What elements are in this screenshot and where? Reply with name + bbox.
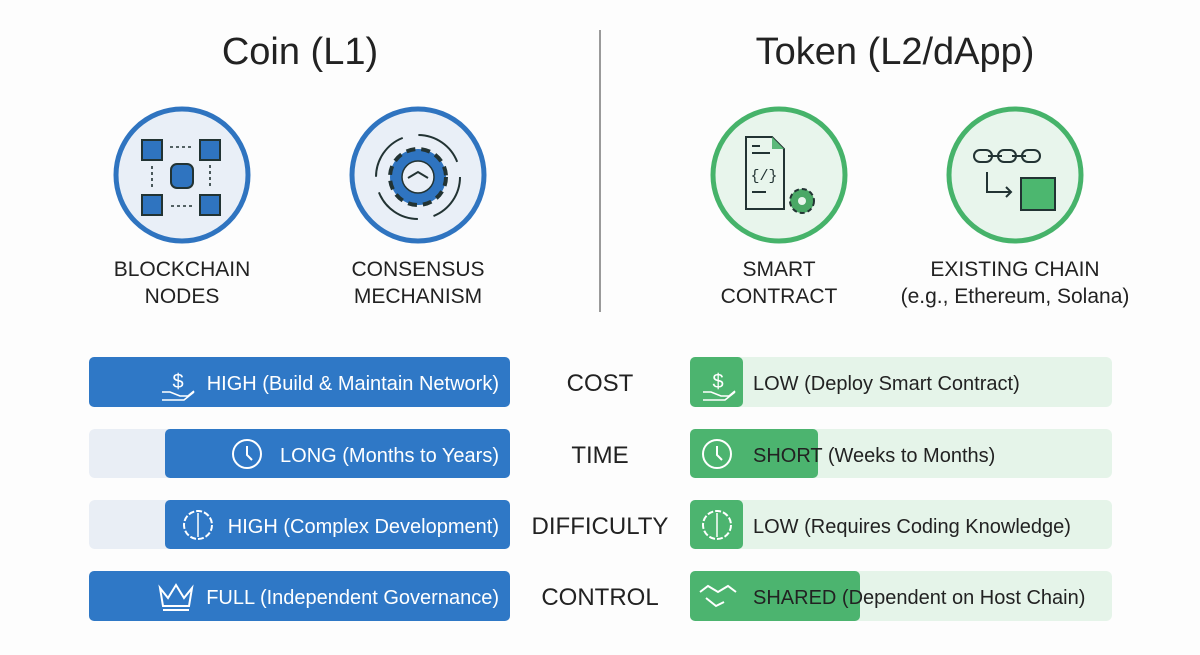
row: time: SHORT (Weeks to Months) (753, 445, 995, 467)
row: difficulty: LOW (Requires Coding Knowledge) (753, 516, 1071, 538)
label: blockchain nodes: BLOCKCHAIN (114, 258, 250, 281)
row: cost: $ (172, 371, 184, 393)
label: smart contract: SMART (742, 258, 816, 281)
icon: smart contract: {/} (750, 168, 778, 185)
icon: existing chain (949, 109, 1081, 241)
label: existing chain: (e.g., Ethereum, Solana) (901, 285, 1129, 308)
row: cost: COST (567, 370, 634, 397)
row: time (89, 429, 1112, 478)
label: consensus: CONSENSUS (351, 258, 485, 281)
label: blockchain nodes: NODES (145, 285, 219, 308)
row: control: SHARED (Dependent on Host Chain) (753, 587, 1085, 609)
row: difficulty: DIFFICULTY (532, 513, 668, 540)
row: time: LONG (Months to Years) (280, 445, 499, 467)
row: control: CONTROL (541, 584, 659, 611)
label: consensus: MECHANISM (354, 285, 482, 308)
icon: smart contract (713, 109, 845, 241)
title: token: Token (L2/dApp) (756, 31, 1034, 73)
row: cost: $ (712, 371, 724, 393)
row: cost: HIGH (Build & Maintain Network) (207, 373, 499, 395)
row: control (89, 571, 1112, 621)
label: existing chain: EXISTING CHAIN (930, 258, 1100, 281)
row: control: FULL (Independent Governance) (206, 587, 499, 609)
row: difficulty: HIGH (Complex Development) (228, 516, 499, 538)
row: difficulty (89, 500, 1112, 549)
row: time: TIME (571, 442, 629, 469)
label: smart contract: CONTRACT (721, 285, 837, 308)
row: cost (89, 357, 1112, 407)
title: coin: Coin (L1) (222, 31, 378, 73)
icon: blockchain nodes (116, 109, 248, 241)
row: cost: LOW (Deploy Smart Contract) (753, 373, 1020, 395)
icon: consensus (352, 109, 484, 241)
